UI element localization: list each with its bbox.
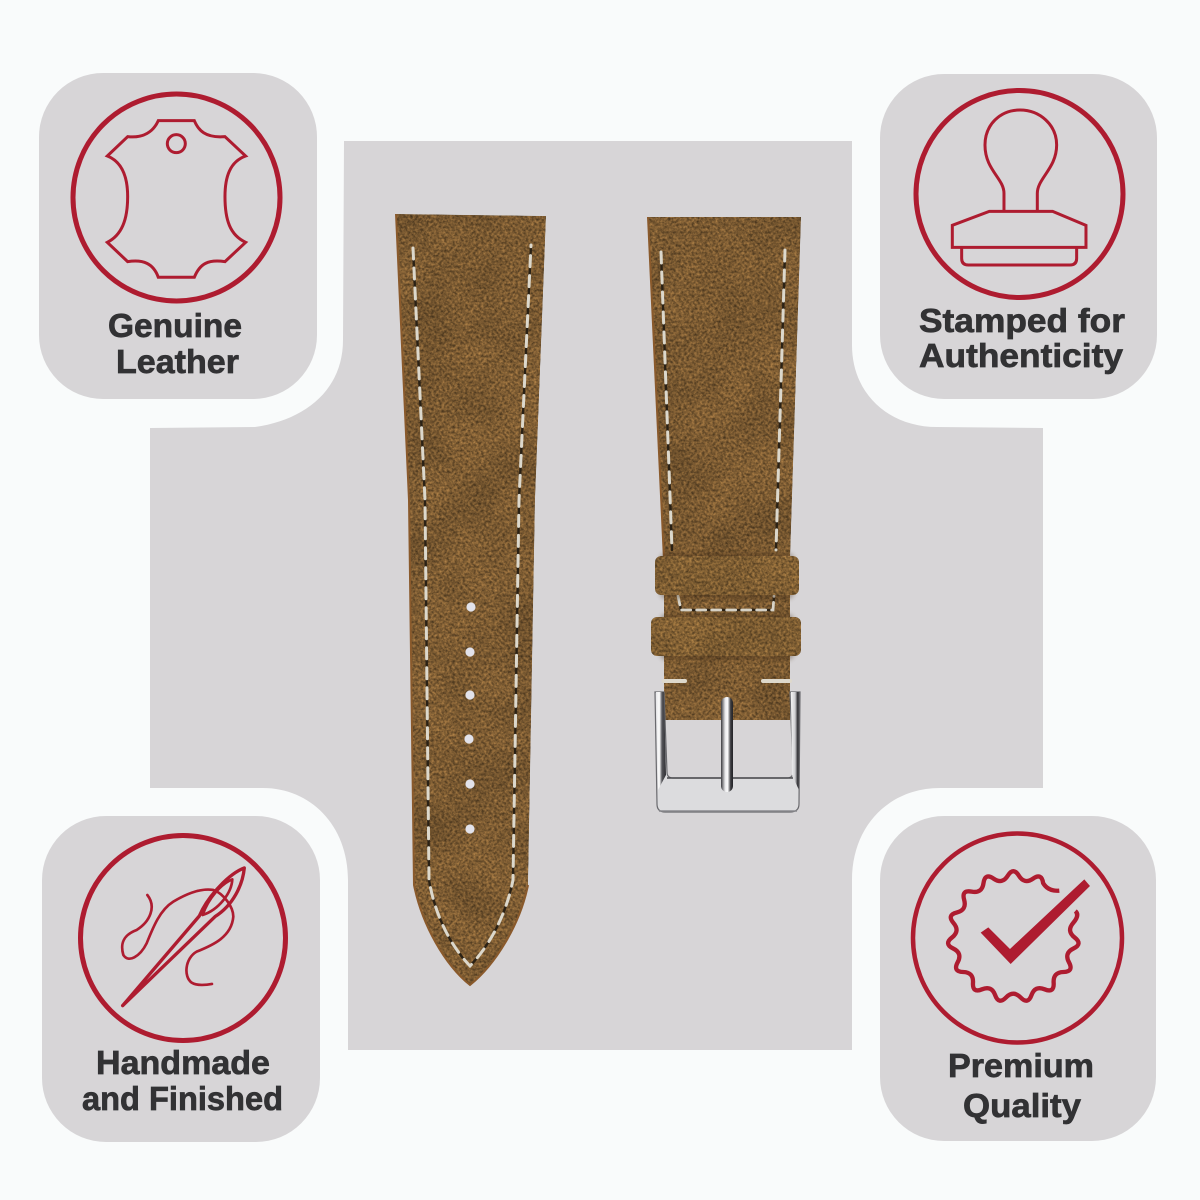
label: Handmade and Finished [82, 1044, 283, 1117]
label: Stamped for Authenticity [919, 302, 1125, 374]
strap holes [464, 602, 476, 834]
icon: stamp in circle [916, 90, 1123, 298]
label: Genuine Leather: Genuine [108, 307, 242, 344]
label: Stamped for Authenticity: Stamped for [919, 302, 1125, 339]
label: Genuine Leather [108, 307, 242, 380]
label: Handmade and Finished: Handmade [96, 1044, 270, 1081]
panel: genuine leather [39, 73, 317, 399]
strap keeper: upper [655, 553, 799, 599]
label: Premium Quality [948, 1047, 1094, 1124]
panel: premium quality [880, 816, 1156, 1141]
icon: check mark seal in circle [913, 834, 1122, 1042]
panel: handmade and finished [42, 816, 320, 1142]
long strap piece with holes [396, 214, 546, 985]
icon: needle and thread in circle [80, 836, 286, 1040]
label: Genuine Leather: Leather [116, 343, 239, 380]
panel: stamped for authenticity [880, 74, 1157, 399]
label: Premium Quality: Premium [948, 1047, 1094, 1084]
label: Premium Quality: Quality [963, 1087, 1082, 1124]
buckle strap piece with keepers and buckle [648, 217, 801, 812]
central grey backdrop panel [150, 141, 1043, 1050]
label: Handmade and Finished: and Finished [82, 1080, 283, 1117]
icon: leather hide in circle [73, 94, 280, 301]
stitching: long strap [413, 245, 531, 966]
buckle tongue [721, 697, 733, 792]
strap keeper: lower [651, 614, 801, 660]
buckle [655, 692, 800, 812]
stitching: buckle strap [661, 250, 790, 681]
label: Stamped for Authenticity: Authenticity [919, 337, 1124, 374]
